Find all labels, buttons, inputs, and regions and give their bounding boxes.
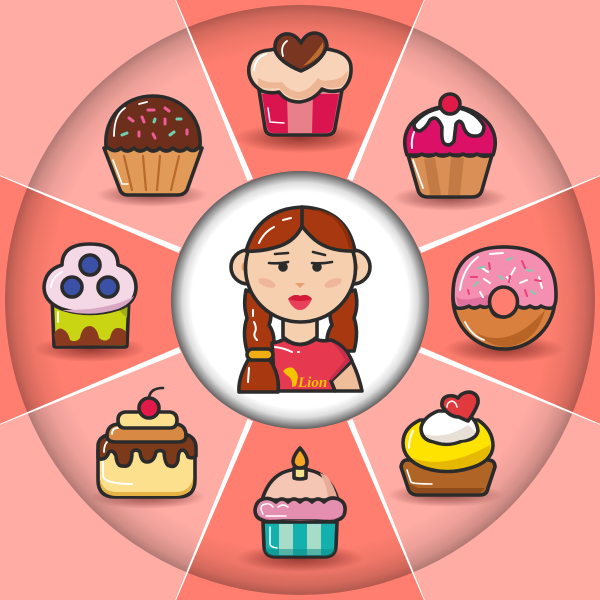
shirt logo text: Lion xyxy=(297,375,327,391)
arm xyxy=(331,358,362,391)
left braid tail xyxy=(239,360,278,392)
face xyxy=(246,214,356,322)
icon: heart cupcake xyxy=(234,33,366,153)
lips xyxy=(288,295,312,310)
icon: pink donut xyxy=(444,247,564,363)
hair tie xyxy=(247,349,273,360)
nose xyxy=(295,283,305,288)
neck xyxy=(283,316,317,344)
icon: yellow cream cake xyxy=(387,392,503,507)
icon: blueberry muffin xyxy=(34,244,146,362)
icon: chocolate sprinkle muffin xyxy=(96,96,208,207)
hair fringe xyxy=(246,207,355,251)
icon: candle cupcake xyxy=(236,448,364,572)
cheeks xyxy=(257,276,277,290)
right braid xyxy=(327,290,357,351)
shirt with logo xyxy=(272,339,352,391)
ears xyxy=(231,250,265,284)
left braid xyxy=(244,290,274,351)
icon: caramel pudding cake xyxy=(90,388,206,509)
eyes and brows xyxy=(269,252,332,263)
icon: girl with braids xyxy=(231,207,370,392)
panel: central white circle xyxy=(171,171,429,429)
icon: cherry cupcake xyxy=(392,94,508,211)
